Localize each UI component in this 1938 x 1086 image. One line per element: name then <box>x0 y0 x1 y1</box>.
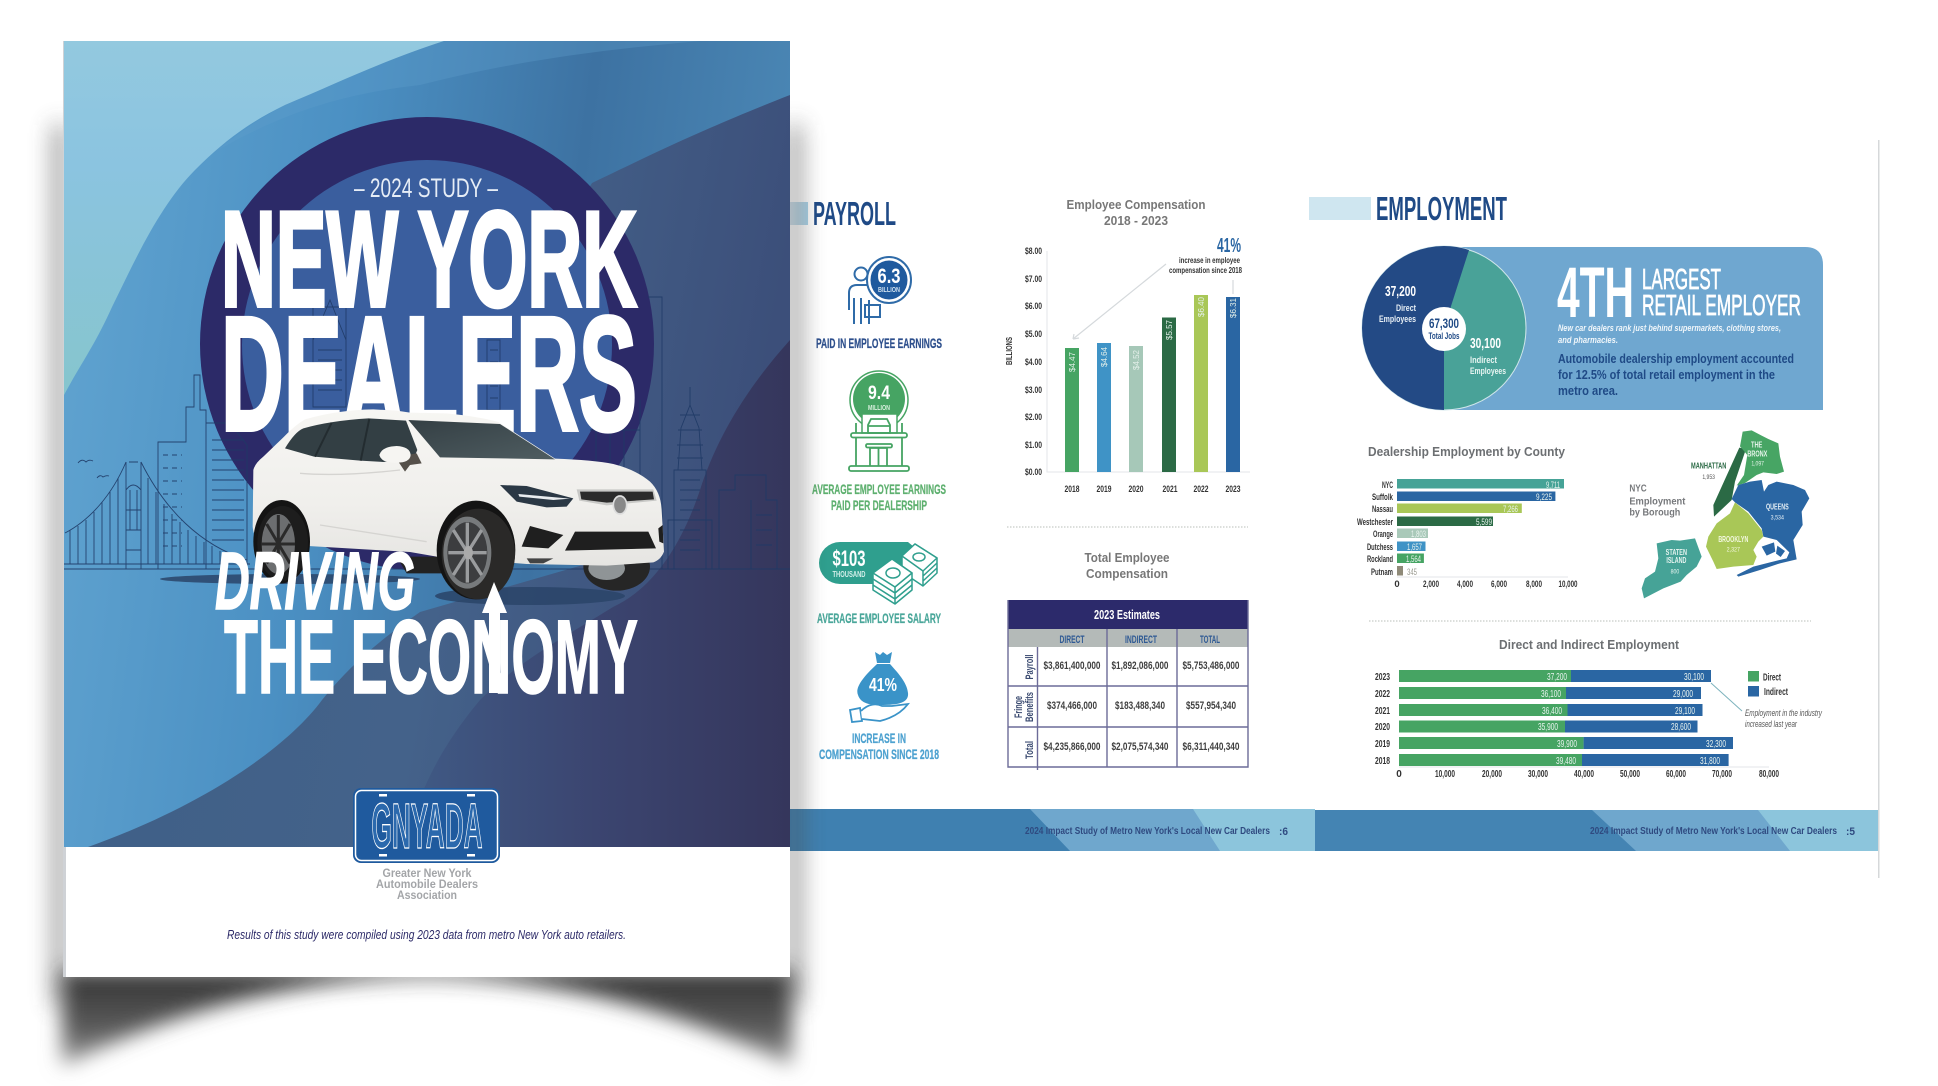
icon: person with 6.3 billion badge: 6.3 <box>878 265 900 288</box>
county labels: NYC <box>1382 480 1393 491</box>
headline <box>1557 254 1801 333</box>
county values: 345 <box>1407 567 1417 577</box>
right page edge line <box>1878 140 1880 878</box>
borough labels: 3,534 <box>1771 514 1784 521</box>
table: 2023 estimates: 2023 Estimates <box>1094 607 1160 622</box>
pie chart: direct and indirect employees: Indirect <box>1470 355 1498 366</box>
borough labels <box>1666 440 1789 575</box>
title: the economy: THE ECONOMY <box>224 599 638 716</box>
icon: money bag with 41 percent and hand <box>850 652 908 722</box>
subtext: New car dealers rank just behind supermarkets, clothing stores, <box>1558 323 1781 334</box>
annotation: employment increased: increased last year <box>1745 719 1798 730</box>
stacked value labels: 32,300 <box>1706 739 1726 750</box>
y axis labels: $5.00 <box>1025 329 1042 339</box>
panel: employment <box>1309 190 1823 780</box>
chart: direct and indirect employment <box>1375 637 1823 780</box>
icon: dealership with 9.4 million badge: 9.4 <box>868 383 890 404</box>
county axis ticks: 4,000 <box>1457 579 1473 590</box>
bar value labels: $6.31 <box>1228 298 1238 318</box>
callout: 41 percent increase: 41% <box>1217 235 1241 257</box>
icon: $103 thousand pill with money stack: $103 <box>832 546 866 571</box>
y axis labels: $8.00 <box>1025 246 1042 256</box>
far front wheel <box>583 543 650 591</box>
x axis ticks: 40,000 <box>1574 769 1594 780</box>
x axis labels: 2020 <box>1128 484 1144 494</box>
manhattan <box>1713 448 1746 517</box>
y axis labels: $6.00 <box>1025 301 1042 311</box>
county values: 7,266 <box>1503 504 1518 514</box>
table: 2023 estimates: Total <box>1024 741 1036 759</box>
county values: 9,711 <box>1546 480 1560 490</box>
page number 5: :5 <box>1846 826 1855 838</box>
table: 2023 estimates: $374,466,000 <box>1047 700 1097 712</box>
y axis title: BILLIONS <box>1004 337 1014 365</box>
x axis labels: 2021 <box>1162 484 1178 494</box>
county values: 9,225 <box>1536 492 1552 502</box>
jamaica bay <box>1754 540 1788 561</box>
county labels: Suffolk <box>1372 492 1393 503</box>
body statement: Automobile dealership employment accounted <box>1558 351 1794 366</box>
county axis ticks: 0 <box>1394 579 1400 590</box>
stacked value labels: 39,480 <box>1556 756 1576 767</box>
table: 2023 estimates: $4,235,866,000 <box>1044 741 1100 753</box>
table: 2023 estimates: $6,311,440,340 <box>1182 741 1240 753</box>
title: driving: DRIVING <box>215 536 415 627</box>
pie chart: direct and indirect employees <box>1362 246 1526 410</box>
title: 2024 study: – 2024 STUDY – <box>354 173 498 203</box>
employment page footer band <box>1315 810 1879 851</box>
payroll heading <box>790 195 896 232</box>
window pillars <box>315 419 369 461</box>
employment footer text: 2024 Impact Study of Metro New York's Local New Car Dealers <box>1590 826 1837 837</box>
stacked value labels: 30,100 <box>1684 672 1704 683</box>
payroll footer text: 2024 Impact Study of Metro New York's Local New Car Dealers <box>1025 826 1270 837</box>
chart: employee compensation 2018-2023 <box>1004 197 1250 494</box>
county axis ticks: 6,000 <box>1491 579 1507 590</box>
table: 2023 estimates <box>1008 600 1248 770</box>
queens <box>1732 480 1809 577</box>
year labels: 2022 <box>1375 689 1390 700</box>
stacked value labels: 29,100 <box>1675 706 1695 717</box>
subtext: and pharmacies. <box>1558 335 1618 346</box>
pie chart: direct and indirect employees: Employees <box>1379 314 1416 325</box>
grille <box>577 489 657 505</box>
panel: payroll <box>790 195 946 762</box>
icon: money bag with 41 percent and hand: 41% <box>869 675 897 695</box>
county labels: Orange <box>1373 529 1393 540</box>
table: 2023 estimates: DIRECT <box>1060 634 1085 646</box>
payroll stat label 4 <box>819 731 939 762</box>
pie chart: direct and indirect employees: Total Jobs <box>1428 331 1460 341</box>
direct bars <box>1399 670 1584 766</box>
stacked value labels: 37,200 <box>1547 672 1567 683</box>
x axis ticks: 20,000 <box>1482 769 1502 780</box>
payroll stat label 2: PAID PER DEALERSHIP <box>831 498 927 513</box>
x axis labels: 2019 <box>1096 484 1112 494</box>
county axis ticks: 10,000 <box>1558 579 1578 590</box>
x axis labels: 2022 <box>1194 484 1208 494</box>
callout: 41 percent increase: increase in employee <box>1179 255 1240 265</box>
subtext <box>1558 323 1781 346</box>
stacked chart title: Direct and Indirect Employment <box>1499 637 1680 652</box>
y axis labels: $1.00 <box>1025 440 1042 450</box>
cover note: Results of this study were compiled using 2023 data from metro New York auto retailers. <box>227 927 626 942</box>
body statement: metro area. <box>1558 383 1618 398</box>
map heading <box>1629 484 1686 519</box>
association name: Automobile Dealers <box>376 879 478 891</box>
legend: Direct <box>1763 672 1781 684</box>
pie chart: direct and indirect employees: Employees <box>1470 366 1506 377</box>
map heading: Employment <box>1629 496 1686 507</box>
county labels: Rockland <box>1367 554 1393 565</box>
mirror <box>398 453 422 472</box>
borough labels: BROOKLYN <box>1718 534 1748 544</box>
employment heading: EMPLOYMENT <box>1376 190 1507 227</box>
x axis ticks: 60,000 <box>1666 769 1686 780</box>
table: 2023 estimates: $557,954,340 <box>1186 700 1236 712</box>
page number 6: :6 <box>1279 826 1288 838</box>
chart: dealership employment by county <box>1357 444 1578 590</box>
icon: person with 6.3 billion badge: BILLION <box>878 287 900 294</box>
x axis ticks: 30,000 <box>1528 769 1548 780</box>
headline: LARGEST <box>1642 264 1721 296</box>
windshield <box>408 420 555 459</box>
bar value labels <box>1067 297 1238 372</box>
legend: Indirect <box>1764 687 1788 698</box>
table: 2023 estimates: TOTAL <box>1200 634 1220 646</box>
county bars <box>1397 479 1564 576</box>
body <box>253 409 664 566</box>
table: 2023 estimates: INDIRECT <box>1125 634 1157 646</box>
pie chart: direct and indirect employees: 67,300 <box>1429 315 1459 331</box>
the bronx <box>1737 430 1784 486</box>
county labels <box>1357 480 1393 578</box>
payroll stat label 1: PAID IN EMPLOYEE EARNINGS <box>816 336 942 351</box>
county values <box>1406 480 1560 577</box>
title: new york dealers: NEW YORK <box>221 183 637 335</box>
payroll stat label 2 <box>812 482 946 513</box>
payroll stat label 4: INCREASE IN <box>852 731 906 746</box>
county labels: Nassau <box>1372 504 1393 515</box>
county labels: Dutchess <box>1367 542 1393 553</box>
year labels: 2020 <box>1375 722 1390 733</box>
association name: Greater New York <box>382 868 472 880</box>
door shading <box>300 470 427 542</box>
staten island <box>1642 538 1702 598</box>
icon: $103 thousand pill with money stack: THOUSAND <box>832 570 866 579</box>
stacked value labels: 28,600 <box>1671 722 1691 733</box>
pie chart: direct and indirect employees: 30,100 <box>1470 335 1501 352</box>
stacked value labels: 35,900 <box>1538 722 1558 733</box>
x axis ticks: 80,000 <box>1759 769 1779 780</box>
payroll heading: PAYROLL <box>813 195 896 232</box>
stacked value labels: 29,000 <box>1673 689 1693 700</box>
y axis labels: $7.00 <box>1025 274 1042 284</box>
borough labels: THE <box>1751 440 1763 450</box>
bar value labels: $4.64 <box>1099 347 1109 367</box>
body statement: for 12.5% of total retail employment in the <box>1558 367 1775 382</box>
payroll stat label 2: AVERAGE EMPLOYEE EARNINGS <box>812 482 946 497</box>
rear underbody <box>397 557 447 573</box>
rear wheel <box>257 506 308 581</box>
annotation: employment increased: Employment in the industry <box>1745 708 1823 719</box>
emblem <box>613 496 627 514</box>
city skyline line art <box>64 297 790 569</box>
y axis labels: $4.00 <box>1025 357 1042 367</box>
front wheel <box>442 509 515 599</box>
county values: 5,599 <box>1476 517 1492 527</box>
borough labels: STATEN <box>1666 547 1687 557</box>
cover drop shadows <box>54 125 800 1066</box>
indirect bars <box>1565 670 1733 766</box>
table: 2023 estimates: $1,892,086,000 <box>1112 660 1168 672</box>
year labels: 2018 <box>1375 756 1390 767</box>
county axis ticks: 8,000 <box>1526 579 1542 590</box>
logo: GNYADA license plate <box>353 788 500 863</box>
headline: RETAIL EMPLOYER <box>1642 290 1801 322</box>
payroll stat label 3: AVERAGE EMPLOYEE SALARY <box>817 611 941 626</box>
pie chart: direct and indirect employees: 37,200 <box>1385 283 1416 300</box>
chart title: 2018 - 2023 <box>1104 213 1168 228</box>
year labels: 2023 <box>1375 672 1390 683</box>
heading: total employee compensation <box>1084 550 1170 581</box>
x axis ticks <box>1396 769 1779 780</box>
bar value labels: $4.52 <box>1131 350 1141 370</box>
stacked value labels: 31,800 <box>1700 756 1720 767</box>
year labels <box>1375 672 1390 767</box>
county axis ticks: 2,000 <box>1423 579 1439 590</box>
ground shadow under car <box>160 574 625 605</box>
bar value labels: $6.40 <box>1196 297 1206 317</box>
y axis labels: $0.00 <box>1025 467 1042 477</box>
table: 2023 estimates: $183,488,340 <box>1115 700 1165 712</box>
legend <box>1748 671 1788 698</box>
car illustration <box>253 409 664 599</box>
stacked value labels: 39,900 <box>1557 739 1577 750</box>
borough labels: MANHATTAN <box>1691 460 1726 470</box>
brooklyn <box>1706 502 1763 569</box>
x axis ticks: 70,000 <box>1712 769 1732 780</box>
y axis labels <box>1025 246 1042 477</box>
body statement <box>1558 351 1794 398</box>
panel: report cover <box>63 41 790 977</box>
headlight <box>500 485 573 507</box>
payroll page footer band <box>790 809 1315 851</box>
x axis labels: 2018 <box>1064 484 1080 494</box>
year labels: 2021 <box>1375 706 1390 717</box>
borough labels: 2,327 <box>1727 546 1740 553</box>
callout: 41 percent increase: compensation since 2018 <box>1169 265 1242 275</box>
x axis labels <box>1064 484 1240 494</box>
employment heading <box>1309 190 1507 227</box>
county labels: Westchester <box>1357 517 1393 528</box>
map heading: NYC <box>1629 484 1647 495</box>
year labels: 2019 <box>1375 739 1390 750</box>
x axis ticks: 50,000 <box>1620 769 1640 780</box>
heading: total employee compensation: Total Employee <box>1084 550 1170 565</box>
association name <box>376 868 478 902</box>
map: NYC employment by borough <box>1629 430 1809 598</box>
table: 2023 estimates: Benefits <box>1024 692 1036 722</box>
stacked value labels: 36,100 <box>1541 689 1561 700</box>
county labels: Putnam <box>1371 567 1393 578</box>
title: new york dealers: DEALERS <box>221 282 637 465</box>
x axis ticks: 10,000 <box>1435 769 1455 780</box>
title: new york dealers <box>221 183 637 465</box>
bars <box>1065 295 1240 472</box>
borough labels: 800 <box>1671 568 1680 575</box>
callout panel: 4th largest retail employer <box>1362 246 1823 410</box>
headline: 4TH <box>1557 254 1634 333</box>
background circle <box>200 117 654 571</box>
county values: 1,803 <box>1411 529 1426 539</box>
x axis labels: 2023 <box>1226 484 1240 494</box>
icon: $103 thousand pill with money stack <box>819 542 937 604</box>
table: 2023 estimates: $3,861,400,000 <box>1044 660 1100 672</box>
icon: dealership with 9.4 million badge <box>849 371 909 471</box>
county axis ticks <box>1394 579 1578 590</box>
county chart title: Dealership Employment by County <box>1368 444 1566 459</box>
payroll stat label 4: COMPENSATION SINCE 2018 <box>819 747 939 762</box>
wheel arches <box>253 500 310 583</box>
heading: total employee compensation: Compensation <box>1086 566 1168 581</box>
chart title: Employee Compensation <box>1066 197 1206 212</box>
arrow rising from economy <box>482 582 507 693</box>
borough labels: BRONX <box>1747 448 1768 458</box>
chart title <box>1066 197 1206 228</box>
county values: 1,657 <box>1407 542 1422 552</box>
table: 2023 estimates: $5,753,486,000 <box>1182 660 1240 672</box>
annotation: employment increased <box>1711 683 1823 730</box>
association name: Association <box>397 890 457 902</box>
panel: report cover: GNYADA <box>372 790 482 862</box>
table: 2023 estimates: $2,075,574,340 <box>1112 741 1168 753</box>
lower intakes <box>522 525 663 563</box>
table: 2023 estimates: Payroll <box>1024 654 1036 680</box>
bar value labels: $5.57 <box>1164 320 1174 340</box>
map heading: by Borough <box>1629 508 1680 519</box>
callout: 41 percent increase <box>1073 235 1242 339</box>
county values: 1,564 <box>1406 554 1421 564</box>
icon: dealership with 9.4 million badge: MILLION <box>868 405 890 412</box>
borough labels: QUEENS <box>1766 502 1789 512</box>
x axis ticks: 0 <box>1396 769 1402 780</box>
y axis labels: $3.00 <box>1025 385 1042 395</box>
y axis labels: $2.00 <box>1025 412 1042 422</box>
stacked value labels <box>1538 672 1726 767</box>
stacked value labels: 36,400 <box>1542 706 1562 717</box>
cover background waves <box>64 41 790 847</box>
bar value labels: $4.47 <box>1067 352 1077 372</box>
pie chart: direct and indirect employees: Direct <box>1396 303 1417 314</box>
borough labels: ISLAND <box>1666 555 1686 565</box>
borough labels: 1,097 <box>1751 461 1764 468</box>
icon: person with 6.3 billion badge <box>849 257 911 324</box>
borough labels: 1,953 <box>1702 474 1715 481</box>
table: 2023 estimates: Fringe <box>1013 696 1025 718</box>
side windows <box>285 418 417 462</box>
